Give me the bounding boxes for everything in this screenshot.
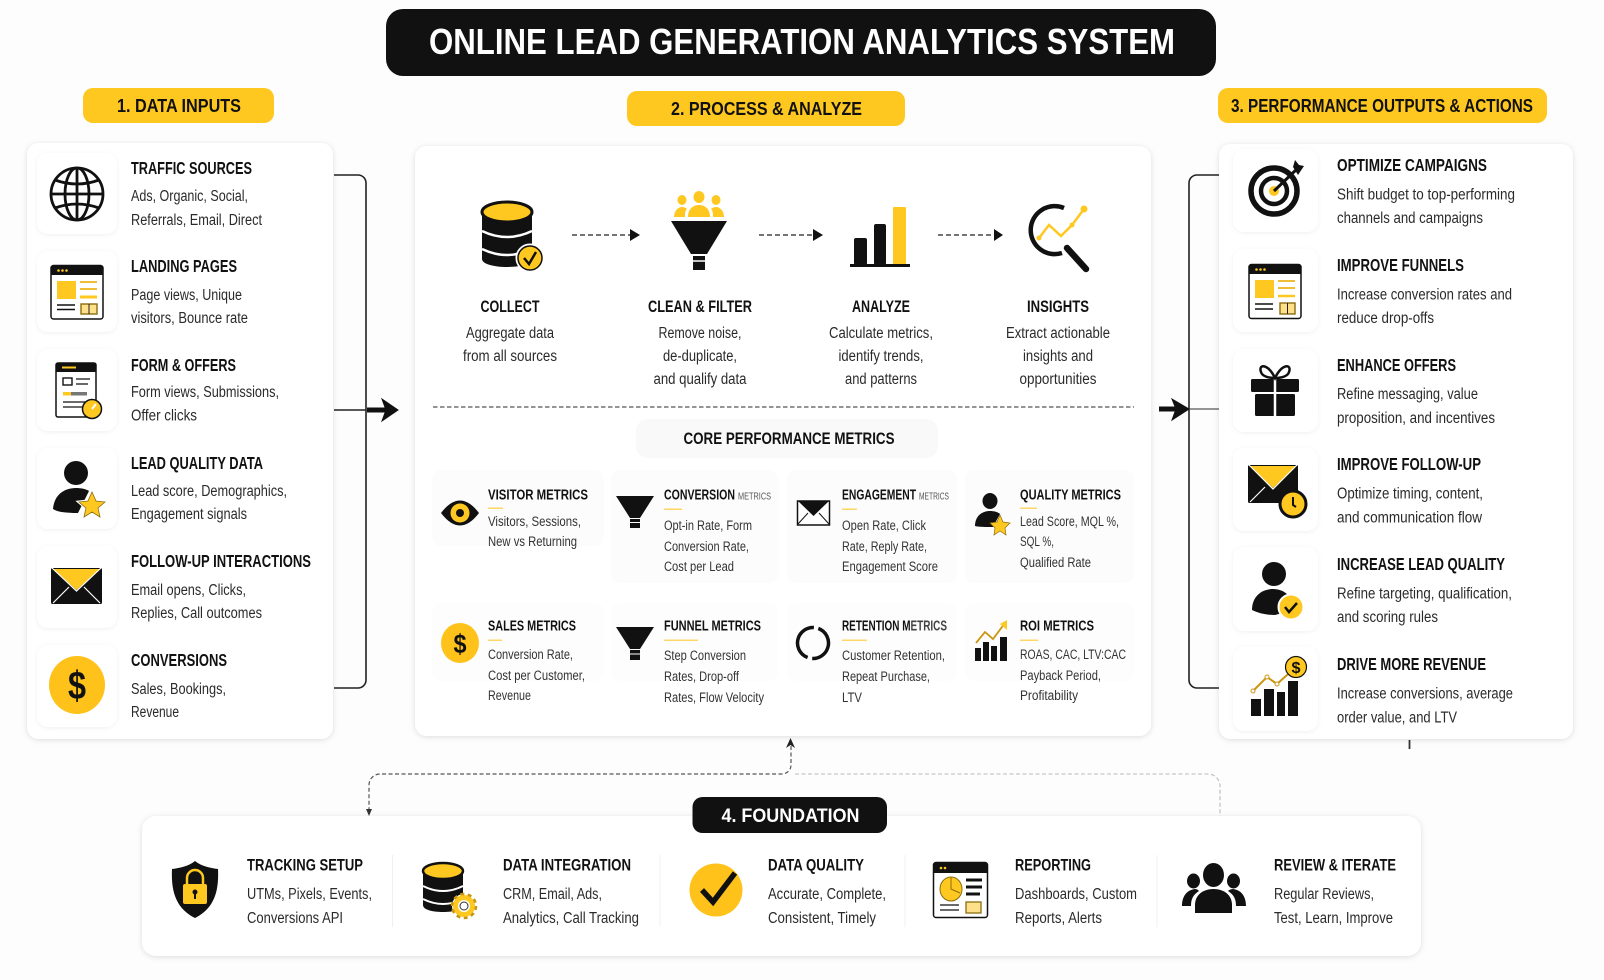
icon: gift box — [1251, 366, 1299, 416]
output: drive more revenue: order value, and LTV — [1337, 710, 1458, 726]
icon: person with check — [1252, 562, 1304, 620]
output: optimize campaigns — [1233, 149, 1515, 232]
output: drive more revenue: Increase conversions, average — [1337, 686, 1513, 702]
icon: bar chart — [850, 207, 910, 267]
foundation: review and iterate: REVIEW & ITERATE — [1274, 856, 1396, 874]
foundation: reporting: REPORTING — [1015, 856, 1091, 874]
input: landing pages: visitors, Bounce rate — [131, 310, 248, 327]
heading: 2. process and analyze: 2. PROCESS & ANALYZE — [671, 99, 862, 119]
output: drive more revenue — [1233, 647, 1513, 731]
metric card: funnel metrics: Step Conversion — [664, 648, 746, 663]
foundation: tracking setup: TRACKING SETUP — [247, 856, 363, 874]
metric card: roi metrics: Profitability — [1020, 688, 1078, 703]
icon: target with arrow — [1251, 160, 1304, 214]
metric card: funnel metrics: Rates, Flow Velocity — [664, 690, 764, 705]
metric card: conversion metrics: Opt-in Rate, Form — [664, 518, 752, 533]
output: enhance offers: proposition, and incentives — [1337, 410, 1495, 427]
input: conversions: Sales, Bookings, — [131, 681, 226, 698]
panel: process and analyze — [415, 146, 1151, 736]
step: clean and filter: de-duplicate, — [663, 348, 737, 365]
foundation: review and iterate: Regular Reviews, — [1274, 886, 1374, 903]
output: enhance offers: Refine messaging, value — [1337, 386, 1478, 403]
metric card: conversion metrics: Conversion Rate, — [664, 539, 749, 554]
output: increase lead quality: and scoring rules — [1337, 609, 1438, 626]
input: lead quality data: Lead score, Demographics, — [131, 483, 287, 500]
icon: revenue chart — [1251, 656, 1306, 716]
heading: 3. performance outputs and actions — [1218, 88, 1547, 123]
foundation: data integration — [423, 856, 639, 927]
icon: web page — [1249, 264, 1301, 318]
step: collect: from all sources — [463, 348, 557, 365]
metric card: visitor metrics: VISITOR METRICS — [488, 487, 588, 503]
output: improve funnels: IMPROVE FUNNELS — [1337, 255, 1464, 275]
icon: form — [56, 363, 102, 418]
input: lead quality data: Engagement signals — [131, 506, 247, 523]
icon: dollar coin: $ — [454, 629, 466, 659]
output: drive more revenue: DRIVE MORE REVENUE — [1337, 654, 1486, 674]
output: enhance offers — [1233, 349, 1495, 432]
output: improve follow-up: IMPROVE FOLLOW-UP — [1337, 454, 1481, 474]
input: conversions: CONVERSIONS — [131, 650, 227, 670]
foundation: tracking setup: UTMs, Pixels, Events, — [247, 886, 372, 903]
step: collect: COLLECT — [480, 298, 540, 316]
icon: dashboard window — [933, 862, 988, 918]
metric card: engagement metrics: Rate, Reply Rate, — [842, 539, 927, 554]
metric card: sales metrics: Cost per Customer, — [488, 668, 585, 683]
metric card: retention metrics: LTV — [842, 690, 862, 705]
step: analyze: and patterns — [845, 371, 917, 388]
metric card: engagement metrics — [787, 470, 957, 583]
foundation: data integration: DATA INTEGRATION — [503, 856, 631, 874]
icon: dollar coin — [441, 623, 479, 663]
heading: 1. data inputs — [83, 88, 274, 123]
step: insights: INSIGHTS — [1027, 298, 1089, 316]
title banner: ONLINE LEAD GENERATION ANALYTICS SYSTEM — [429, 21, 1175, 62]
foundation: review and iterate — [1182, 856, 1396, 927]
icon: dollar coin: $ — [68, 664, 86, 708]
step: analyze — [829, 207, 933, 388]
step: clean and filter: Remove noise, — [658, 325, 742, 342]
output: increase lead quality: INCREASE LEAD QUALITY — [1337, 554, 1505, 574]
foundation: tracking setup — [172, 856, 372, 927]
foundation: reporting: Dashboards, Custom — [1015, 886, 1137, 903]
output: optimize campaigns: Shift budget to top-performing — [1337, 186, 1515, 204]
metric card: engagement metrics: Engagement Score — [842, 559, 938, 574]
input: conversions — [37, 645, 227, 727]
icon: funnel — [616, 627, 654, 660]
panel: foundation — [142, 816, 1421, 956]
step: analyze: identify trends, — [838, 348, 924, 365]
foundation: data quality: DATA QUALITY — [768, 856, 864, 874]
icon: roi chart — [975, 620, 1007, 661]
icon: revenue chart: $ — [1292, 660, 1301, 677]
input: lead quality data: LEAD QUALITY DATA — [131, 453, 263, 473]
step: clean and filter: and qualify data — [654, 371, 747, 388]
heading: 4. foundation — [692, 797, 887, 833]
metric card: conversion metrics: Cost per Lead — [664, 559, 734, 574]
icon: envelope — [51, 568, 102, 604]
metric card: conversion metrics — [611, 470, 778, 583]
metric card: roi metrics — [965, 603, 1134, 703]
icon: funnel with people — [671, 191, 727, 270]
heading: 2. process and analyze — [627, 91, 905, 126]
step: analyze: Calculate metrics, — [829, 325, 933, 342]
input: form and offers: Form views, Submissions, — [131, 384, 279, 401]
output: optimize campaigns: OPTIMIZE CAMPAIGNS — [1337, 155, 1487, 175]
arrow: analyze to insights — [938, 229, 1003, 241]
heading: core performance metrics: CORE PERFORMANCE METRICS — [684, 430, 894, 448]
output: improve follow-up: Optimize timing, content, — [1337, 486, 1483, 502]
metric card: conversion metrics: METRICS — [738, 490, 771, 502]
icon: eye — [441, 500, 479, 526]
arrow: collect to clean — [572, 229, 640, 241]
metric card: retention metrics: Repeat Purchase, — [842, 669, 930, 684]
icon: envelope — [798, 501, 830, 525]
output: improve funnels: reduce drop-offs — [1337, 310, 1434, 327]
metric card: quality metrics — [965, 470, 1134, 583]
metric card: visitor metrics — [432, 470, 604, 549]
input: form and offers — [37, 349, 279, 431]
metric card: roi metrics: ROAS, CAC, LTV:CAC — [1020, 647, 1126, 662]
input: follow-up interactions — [37, 546, 311, 628]
icon: person with star — [53, 461, 105, 517]
metric card: quality metrics: Qualified Rate — [1020, 555, 1091, 570]
input: traffic sources: Ads, Organic, Social, — [131, 188, 248, 205]
metric card: visitor metrics: Visitors, Sessions, — [488, 514, 581, 529]
foundation: data quality — [690, 856, 886, 927]
output: improve follow-up: and communication flow — [1337, 510, 1483, 526]
foundation: data integration: CRM, Email, Ads, — [503, 886, 602, 903]
metric card: funnel metrics — [611, 603, 778, 705]
metric card: retention metrics — [787, 603, 957, 705]
icon: web page — [51, 266, 103, 319]
output: improve funnels — [1233, 249, 1512, 332]
step: insights: insights and — [1023, 348, 1093, 365]
metric card: engagement metrics: Open Rate, Click — [842, 518, 926, 533]
step: insights — [1006, 206, 1110, 388]
step: clean and filter — [648, 191, 752, 388]
metric card: retention metrics: RETENTION METRICS — [842, 618, 947, 634]
step: collect: Aggregate data — [466, 325, 554, 342]
input: form and offers: Offer clicks — [131, 408, 197, 424]
step: collect — [463, 202, 557, 365]
icon: database with gear — [423, 863, 476, 918]
heading: 3. performance outputs and actions: 3. PERFORMANCE OUTPUTS & ACTIONS — [1231, 96, 1533, 116]
input: follow-up interactions: Email opens, Clicks, — [131, 582, 246, 599]
input: traffic sources — [37, 153, 263, 234]
step: analyze: ANALYZE — [852, 298, 910, 316]
metric card: roi metrics: ROI METRICS — [1020, 618, 1094, 634]
foundation: review and iterate: Test, Learn, Improve — [1274, 910, 1393, 927]
arrow: tick under outputs panel — [1408, 740, 1410, 749]
foundation: data integration: Analytics, Call Tracking — [503, 910, 639, 927]
icon: envelope with clock — [1248, 465, 1306, 517]
metric card: sales metrics: Conversion Rate, — [488, 647, 573, 662]
icon: person with star — [975, 493, 1010, 535]
panel: performance outputs — [1219, 144, 1573, 739]
icon: circular arrows — [793, 623, 833, 663]
output: enhance offers: ENHANCE OFFERS — [1337, 355, 1456, 375]
metric card: roi metrics: Payback Period, — [1020, 668, 1101, 683]
metric card: sales metrics: SALES METRICS — [488, 618, 576, 634]
input: lead quality data — [37, 448, 287, 529]
input: conversions: Revenue — [131, 704, 179, 721]
heading: core performance metrics — [636, 419, 938, 458]
icon: dollar coin — [49, 656, 105, 714]
metric card: conversion metrics: CONVERSION — [664, 487, 735, 503]
foundation: reporting — [933, 856, 1137, 927]
metric card: retention metrics: Customer Retention, — [842, 648, 945, 663]
panel: data inputs — [27, 143, 333, 739]
metric card: quality metrics: Lead Score, MQL %, — [1020, 514, 1119, 529]
output: increase lead quality — [1233, 547, 1512, 631]
output: improve funnels: Increase conversion rates and — [1337, 286, 1512, 304]
input: traffic sources: TRAFFIC SOURCES — [131, 158, 252, 178]
metric card: engagement metrics: METRICS — [919, 490, 949, 502]
metric card: sales metrics — [432, 603, 604, 703]
output: increase lead quality: Refine targeting, qualification, — [1337, 586, 1512, 602]
output: improve follow-up — [1233, 448, 1483, 531]
icon: shield with lock — [172, 861, 218, 918]
metric card: funnel metrics: Rates, Drop-off — [664, 669, 739, 684]
metric card: quality metrics: QUALITY METRICS — [1020, 487, 1121, 503]
input: landing pages: Page views, Unique — [131, 287, 242, 304]
heading: 1. data inputs: 1. DATA INPUTS — [117, 96, 241, 116]
title banner — [386, 9, 1216, 76]
metric card: funnel metrics: FUNNEL METRICS — [664, 618, 761, 634]
metric card: sales metrics: Revenue — [488, 688, 531, 703]
input: form and offers: FORM & OFFERS — [131, 355, 236, 375]
icon: funnel — [616, 496, 654, 528]
icon: team — [1182, 863, 1246, 913]
foundation: reporting: Reports, Alerts — [1015, 910, 1102, 927]
input: follow-up interactions: FOLLOW-UP INTERACTIONS — [131, 551, 311, 571]
arrow: foundation feedback loop — [366, 738, 1220, 816]
connector: process to outputs — [1159, 175, 1219, 688]
metric card: engagement metrics: ENGAGEMENT — [842, 487, 916, 503]
icon: magnifier with trend — [1031, 206, 1088, 269]
heading: 4. foundation: 4. FOUNDATION — [722, 805, 860, 827]
foundation: data quality: Accurate, Complete, — [768, 886, 886, 903]
input: landing pages: LANDING PAGES — [131, 256, 237, 276]
step: clean and filter: CLEAN & FILTER — [648, 298, 752, 316]
arrow: clean to analyze — [759, 229, 823, 241]
output: optimize campaigns: channels and campaigns — [1337, 210, 1483, 227]
input: traffic sources: Referrals, Email, Direct — [131, 212, 263, 229]
step: insights: opportunities — [1020, 371, 1097, 388]
input: follow-up interactions: Replies, Call outcomes — [131, 605, 262, 622]
step: insights: Extract actionable — [1006, 325, 1110, 342]
foundation: data quality: Consistent, Timely — [768, 910, 876, 927]
input: landing pages — [37, 251, 248, 332]
foundation: tracking setup: Conversions API — [247, 910, 343, 927]
icon: check circle — [690, 864, 742, 916]
icon: database with check — [482, 202, 542, 270]
metric card: visitor metrics: New vs Returning — [488, 534, 577, 549]
icon: globe — [51, 168, 103, 220]
connector: inputs to process — [334, 175, 398, 688]
metric card: quality metrics: SQL %, — [1020, 534, 1054, 549]
